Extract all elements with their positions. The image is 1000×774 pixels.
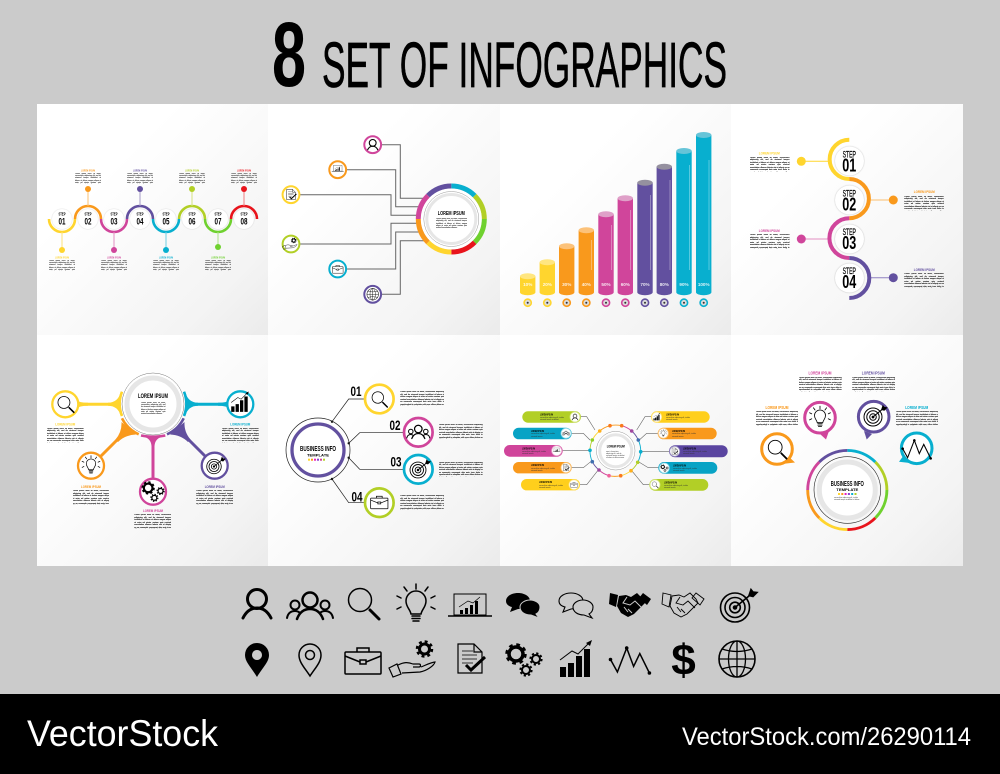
footer bar: VectorStock — [27, 713, 218, 754]
connector arms — [78, 404, 228, 479]
bar percentage labels: 100% — [698, 282, 710, 287]
bar percentage labels: 60% — [621, 282, 630, 287]
hub — [596, 431, 635, 470]
step labels: 05 — [162, 216, 170, 226]
bar percentage labels: 20% — [543, 282, 552, 287]
badge ring: TEMPLATE — [836, 488, 859, 492]
panel: eight step timeline — [37, 104, 268, 335]
arm flares — [75, 392, 231, 446]
circle icons — [371, 392, 430, 509]
descriptions — [400, 391, 483, 510]
junction dots — [331, 420, 350, 480]
balloon captions: LOREM IPSUM — [862, 370, 885, 375]
badge ring — [808, 450, 887, 530]
pill descriptions — [522, 416, 710, 488]
hub: LOREM IPSUM — [607, 444, 625, 448]
step labels: STEP — [58, 212, 66, 216]
central badge — [286, 418, 350, 482]
balloon: purple — [858, 401, 889, 440]
step discs — [835, 146, 864, 292]
connector lines — [300, 145, 425, 294]
icon circles — [365, 385, 433, 517]
connector lines — [563, 417, 669, 485]
hub ring — [418, 186, 484, 252]
step circles — [52, 209, 254, 229]
badge ring: BUSINESS INFO — [831, 481, 864, 488]
node captions: LOREM IPSUM — [55, 422, 76, 427]
footer bar: VectorStock.com/26290114 — [682, 723, 971, 751]
step labels: STEP — [162, 212, 170, 216]
step text — [842, 148, 856, 292]
numbers: 02 — [390, 417, 401, 433]
bar percentage labels: 30% — [562, 282, 571, 287]
step text: STEP — [843, 226, 856, 237]
step captions: LOREM IPSUM — [185, 168, 199, 172]
step labels: 03 — [110, 216, 118, 226]
pill text: LOREM IPSUM — [531, 429, 544, 433]
panel: cylinder bar chart — [500, 104, 731, 335]
panel: hub with six linked icons — [268, 104, 500, 335]
pill text: LOREM IPSUM — [540, 413, 553, 417]
badge ring: Lorem ipsum dolor sit amet, consectetur adipiscing elit, sed do eiusmod tempor incididunt ut labore. — [834, 496, 860, 501]
balloon: pink — [805, 402, 835, 440]
title: 8 — [272, 4, 306, 106]
central badge: TEMPLATE — [307, 452, 329, 458]
pill icon circles — [552, 412, 680, 490]
step captions: LOREM IPSUM — [133, 168, 147, 172]
central circle — [122, 373, 184, 435]
right pills — [649, 411, 728, 491]
step labels: STEP — [188, 212, 196, 216]
numbers: 04 — [352, 488, 363, 504]
balloon captions — [756, 370, 938, 426]
node captions: LOREM IPSUM — [81, 484, 101, 489]
icon set row two — [245, 636, 755, 685]
bottom markers — [524, 299, 707, 306]
step captions — [49, 168, 257, 270]
pill icons — [553, 413, 678, 488]
step labels: 08 — [240, 216, 248, 226]
pill text — [522, 413, 696, 484]
bar highlights — [592, 160, 709, 270]
step labels — [58, 212, 248, 226]
arc collars — [120, 392, 186, 437]
step captions: LOREM IPSUM — [914, 267, 935, 272]
footer bar — [0, 694, 1000, 774]
icon set row one — [243, 584, 757, 622]
step labels: STEP — [84, 212, 92, 216]
step ribbon arcs — [49, 206, 257, 232]
step captions — [750, 150, 944, 288]
panel: pill menu around a hub — [500, 335, 731, 566]
icon nodes — [283, 136, 381, 303]
central circle: LOREM IPSUM — [138, 394, 168, 400]
bar percentage labels: 50% — [601, 282, 611, 287]
step text: 01 — [842, 156, 856, 176]
step labels: STEP — [240, 212, 248, 216]
panel: speech balloons around badge — [731, 335, 963, 566]
panel: business info tree — [268, 335, 500, 566]
pill text: LOREM IPSUM — [664, 480, 677, 484]
pill text: LOREM IPSUM — [531, 463, 544, 467]
stems and end dots — [797, 157, 898, 282]
step captions: LOREM IPSUM — [759, 228, 780, 233]
step captions: LOREM IPSUM — [107, 256, 121, 260]
step text: STEP — [843, 188, 856, 198]
step captions: LOREM IPSUM — [159, 256, 173, 260]
step labels: STEP — [136, 212, 144, 216]
step captions: LOREM IPSUM — [237, 168, 251, 172]
pill text: LOREM IPSUM — [539, 480, 552, 484]
step labels: 04 — [136, 216, 144, 226]
step labels: 07 — [214, 216, 222, 226]
step labels: 01 — [58, 216, 66, 226]
hub ring segments — [590, 425, 641, 476]
panel: radial five node diagram — [37, 335, 268, 566]
node captions: LOREM IPSUM — [205, 484, 225, 489]
step captions: LOREM IPSUM — [759, 150, 780, 156]
bar percentage labels — [523, 282, 710, 287]
title — [272, 4, 727, 106]
step text: 04 — [842, 272, 856, 292]
balloon captions: LOREM IPSUM — [905, 405, 929, 410]
central badge: BUSINESS INFO — [300, 446, 336, 453]
pill text: LOREM IPSUM — [666, 413, 679, 417]
step captions: LOREM IPSUM — [55, 256, 69, 260]
panel: four vertical steps — [731, 104, 963, 335]
bar percentage labels: 10% — [523, 282, 532, 287]
balloon captions: LOREM IPSUM — [808, 370, 832, 375]
step text: STEP — [843, 265, 856, 276]
stems and dots — [59, 186, 247, 253]
step captions: LOREM IPSUM — [914, 189, 935, 194]
balloon captions: LOREM IPSUM — [766, 405, 789, 410]
step labels: 02 — [84, 216, 92, 226]
bar percentage labels: 90% — [679, 282, 689, 287]
hub ring: LOREM IPSUM — [438, 211, 465, 217]
tree lines — [332, 399, 404, 503]
node icons — [282, 139, 378, 300]
left pills — [504, 411, 581, 490]
node captions: LOREM IPSUM — [230, 422, 251, 427]
icon set row two: $ — [671, 636, 696, 685]
bar percentage labels: 40% — [582, 282, 591, 287]
pill text: LOREM IPSUM — [683, 447, 696, 451]
node captions — [47, 422, 259, 529]
bar percentage labels: 70% — [640, 282, 650, 287]
node icons — [58, 392, 249, 501]
step text: 02 — [842, 194, 856, 214]
node captions: LOREM IPSUM — [143, 508, 163, 513]
step text: STEP — [843, 148, 856, 160]
numbers — [350, 383, 402, 504]
step labels: 06 — [188, 216, 196, 226]
step text: 03 — [842, 233, 856, 253]
balloon: orange — [762, 434, 795, 464]
numbers: 01 — [350, 383, 362, 399]
bar percentage labels: 80% — [660, 282, 669, 287]
balloon: cyan — [899, 433, 932, 464]
step labels: STEP — [214, 212, 222, 216]
pill text: LOREM IPSUM — [522, 446, 535, 450]
step captions: LOREM IPSUM — [211, 256, 225, 260]
cylinder bars — [520, 132, 711, 295]
pill text: LOREM IPSUM — [673, 463, 686, 467]
hub ring dots — [588, 424, 642, 478]
step labels: STEP — [110, 212, 118, 216]
numbers: 03 — [390, 454, 402, 470]
nodes — [52, 391, 253, 505]
step captions: LOREM IPSUM — [81, 168, 95, 172]
pill text: LOREM IPSUM — [672, 429, 685, 433]
curved ribbon — [829, 140, 869, 298]
